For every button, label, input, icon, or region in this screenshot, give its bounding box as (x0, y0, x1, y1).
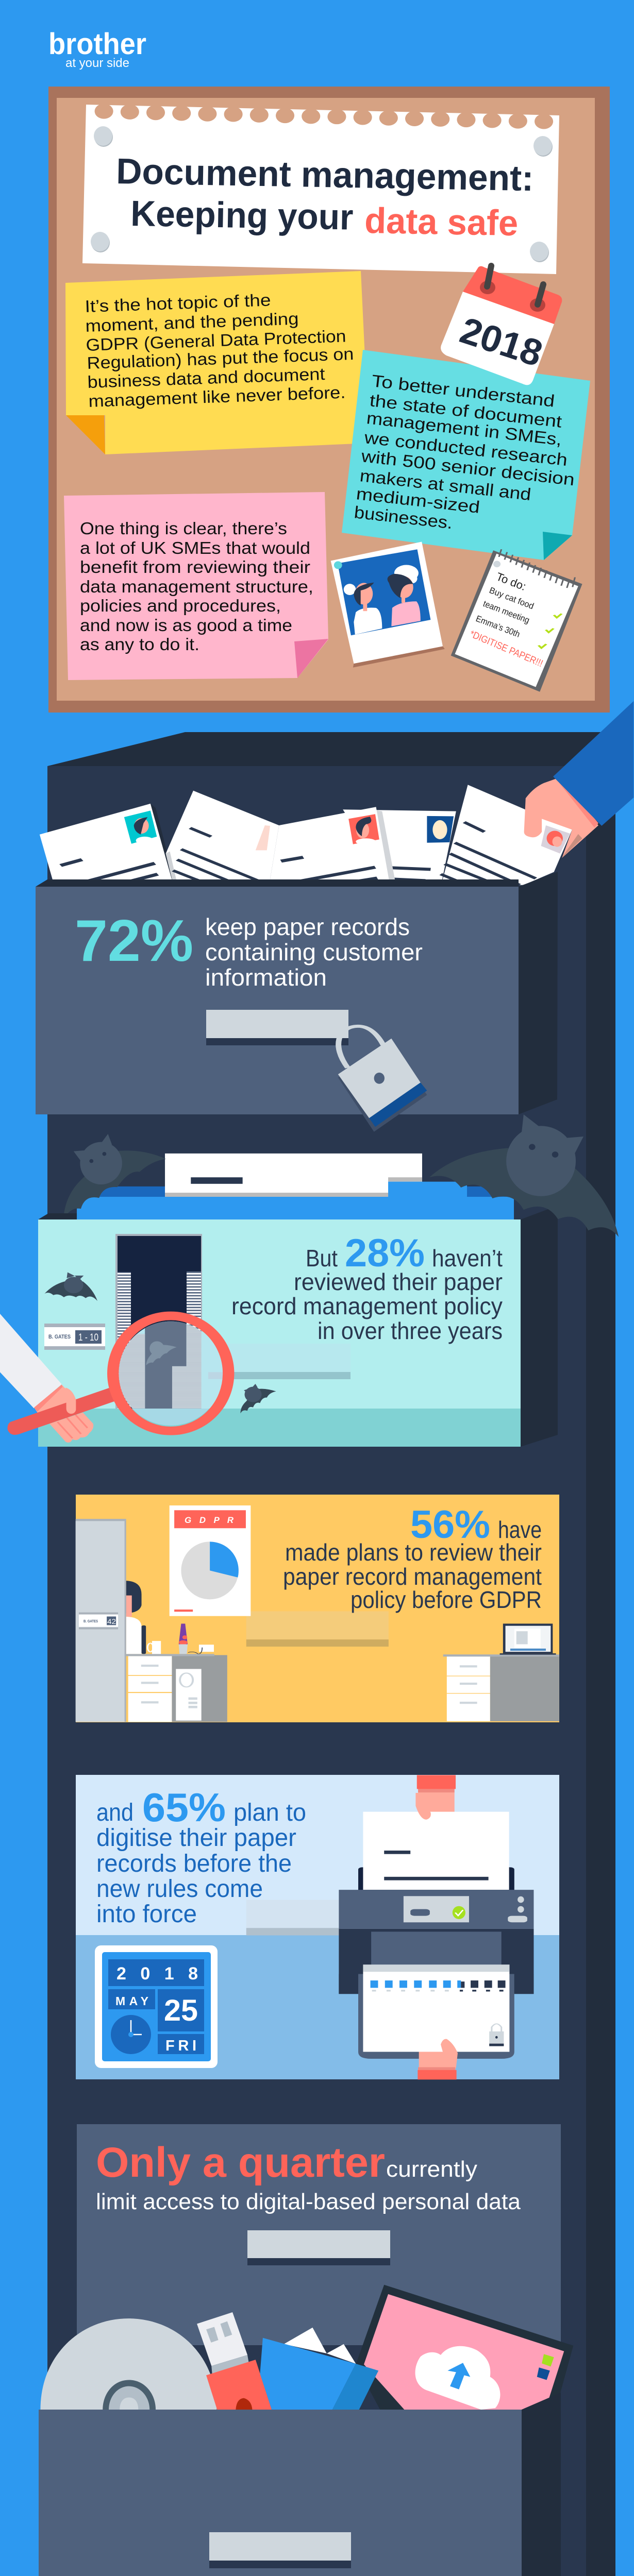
panel: 56% review plans: G D P R (185, 1515, 234, 1525)
text: 28%: But (306, 1245, 338, 1272)
title paper (82, 104, 559, 274)
sticky note: cyan: medium-sized (355, 484, 481, 517)
reaching hand (524, 779, 598, 858)
document behind (343, 809, 456, 887)
calendar clock display: 25 (164, 1994, 198, 2027)
brother logo: brother (48, 27, 146, 61)
icon: blue folder with papers (260, 2328, 378, 2410)
calendar 2018 (441, 266, 562, 385)
stat: 72%: 72% (75, 908, 193, 974)
panel: 56% review plans: B. GATES (84, 1620, 98, 1623)
text: 65%: into force (96, 1901, 197, 1928)
document with lines (166, 791, 279, 887)
text: only a quarter: currently (386, 2157, 477, 2182)
text: 65%: 65% (142, 1785, 226, 1830)
bat: small upper (44, 1273, 97, 1301)
notepad to-do list (451, 549, 582, 692)
text: 56%: have (498, 1516, 542, 1543)
notepad to-do list: team meeting (482, 599, 531, 625)
magnifying glass held by hand (0, 1314, 230, 1443)
hand lower fingers (49, 1413, 93, 1443)
text: 28%: haven’t (432, 1245, 503, 1272)
sticky note: yellow: GDPR (General Data Protection (86, 326, 346, 354)
blue sleeve (553, 701, 633, 826)
sticky note: yellow: Regulation) has put the focus on (87, 344, 354, 372)
bat: left (63, 1134, 166, 1219)
left cabinet with label (76, 1519, 126, 1722)
translucent drawer handle (246, 1900, 341, 1936)
calendar clock display (95, 1945, 218, 2068)
sticky note: pink: data management structure, (80, 577, 313, 596)
title: data safe (364, 200, 519, 243)
sticky note: cyan: makers at small and (359, 466, 532, 504)
stat: 72% (75, 908, 423, 991)
calendar 2018: 2018 (455, 310, 547, 375)
panel: only a quarter drawer back (77, 2124, 561, 2345)
translucent drawer handle (208, 1344, 351, 1379)
right desk with laptop (443, 1623, 559, 1721)
paper documents in top drawer (40, 701, 633, 887)
brother logo: at your side (65, 56, 129, 70)
printer scanner (339, 1775, 533, 2079)
drawer handle (247, 2230, 390, 2265)
title: Keeping your (130, 193, 354, 238)
sticky note: pink: benefit from reviewing their (80, 557, 310, 577)
text: 56%: policy before GDPR (351, 1586, 542, 1613)
second drawer front (38, 1206, 558, 1447)
text: 65%: and (96, 1799, 134, 1826)
door label B. Gates (44, 1324, 105, 1350)
text: 28% (231, 1231, 503, 1344)
panel: 56% review plans (76, 1495, 559, 1722)
text: 65%: new rules come (96, 1875, 263, 1903)
drawer handle (209, 2532, 351, 2568)
document with coral portrait (441, 785, 572, 887)
text: 28%: in over three years (318, 1317, 503, 1344)
sticky note: yellow: moment, and the pending (85, 309, 299, 335)
palm (35, 1385, 76, 1422)
mug and lava lamp (147, 1623, 214, 1654)
sticky note: cyan: To better understand (371, 371, 556, 411)
lens view (119, 1321, 223, 1426)
bat: large right (429, 1114, 619, 1237)
icon: hanging padlock (338, 1026, 427, 1132)
top drawer front (36, 872, 558, 1114)
filing cabinet body (47, 732, 615, 2576)
sticky note: cyan: businesses. (353, 502, 454, 532)
bat: small lower (240, 1384, 276, 1413)
sticky note: pink: One thing is clear, there’s (80, 519, 287, 538)
stat: 72%: keep paper records (205, 913, 410, 940)
folder with file (77, 1154, 514, 1219)
text: 56%: made plans to review their (285, 1539, 542, 1566)
icon: USB stick (197, 2312, 272, 2410)
sticky note: pink: and now is as good a time (80, 616, 292, 635)
text: 28%: record management policy (231, 1293, 503, 1319)
sticky note: yellow (65, 271, 369, 454)
notepad to-do list: *DIGITISE PAPER!!! (468, 629, 544, 669)
sticky note: pink: a lot of UK SMEs that would (80, 538, 310, 557)
panel: 56% review plans: 42 (107, 1617, 116, 1625)
text: only a quarter (96, 2139, 521, 2214)
text: 56%: 56% (410, 1503, 490, 1547)
sticky note: yellow: business data and document (87, 364, 325, 392)
polaroid photo (331, 541, 445, 668)
title: Document management: (116, 151, 534, 198)
text: 65% (96, 1785, 306, 1928)
sticky note: cyan: the state of document (369, 391, 563, 431)
sticky note: cyan: with 500 senior decision (360, 446, 576, 489)
door label B. Gates: B. GATES (48, 1334, 71, 1340)
sleeve (0, 1314, 62, 1408)
sticky note: cyan: management in SMEs, (365, 408, 563, 449)
text: 56%: paper record management (283, 1563, 542, 1590)
left desk (126, 1654, 227, 1722)
title (116, 151, 534, 243)
calendar clock display: 2018 (116, 1964, 198, 1984)
sticky note: pink (64, 492, 328, 680)
top hand and paper (363, 1775, 509, 1890)
panel: 65% digitise plans (76, 1775, 559, 2079)
icon: CD disc (40, 2318, 216, 2410)
handle (8, 1387, 114, 1435)
sticky note: yellow: It’s the hot topic of the (85, 290, 271, 316)
text: 56% (283, 1503, 542, 1613)
bottom hand (418, 2039, 458, 2079)
sticky note: pink: as any to do it. (80, 635, 199, 654)
text: 65%: digitise their paper (96, 1824, 296, 1852)
lower drawer front (39, 2393, 561, 2576)
translucent drawer handle (246, 1611, 389, 1647)
stat: 72%: information (205, 964, 327, 991)
window tower with blinds (115, 1234, 202, 1409)
door label B. Gates: 1 - 10 (78, 1332, 98, 1343)
calendar clock display: MAY (115, 1994, 148, 2008)
sticky note: cyan (342, 350, 590, 560)
output tablet (339, 1964, 533, 2059)
notepad to-do list: Buy cat food (488, 585, 535, 611)
text: only a quarter: Only a quarter (96, 2139, 385, 2186)
sticky note: cyan: we conducted research (363, 428, 569, 469)
panel: corkboard (48, 87, 610, 713)
text: 65%: records before the (96, 1850, 292, 1877)
document with teal portrait (40, 804, 176, 887)
stat: 72%: containing customer (205, 939, 423, 965)
calendar clock display: FRI (165, 2038, 196, 2054)
text: 28%: reviewed their paper (294, 1268, 503, 1295)
icon: laptop with cloud (356, 2285, 573, 2410)
notepad to-do list: Emma’s 30th (475, 614, 521, 639)
text: 65%: plan to (233, 1799, 306, 1826)
sticky note: yellow: management like never before. (88, 383, 346, 411)
GDPR poster with pie chart (170, 1505, 251, 1616)
text: 28%: 28% (345, 1231, 425, 1275)
text: only a quarter: limit access to digital-based personal data (96, 2189, 521, 2214)
digital items in lower drawer (40, 2285, 573, 2410)
person behind cabinet (126, 1581, 146, 1654)
notepad to-do list: To do: (494, 570, 528, 593)
drawer handle (206, 1010, 348, 1045)
document with red portrait (269, 807, 396, 887)
sticky note: pink: policies and procedures, (80, 596, 281, 615)
